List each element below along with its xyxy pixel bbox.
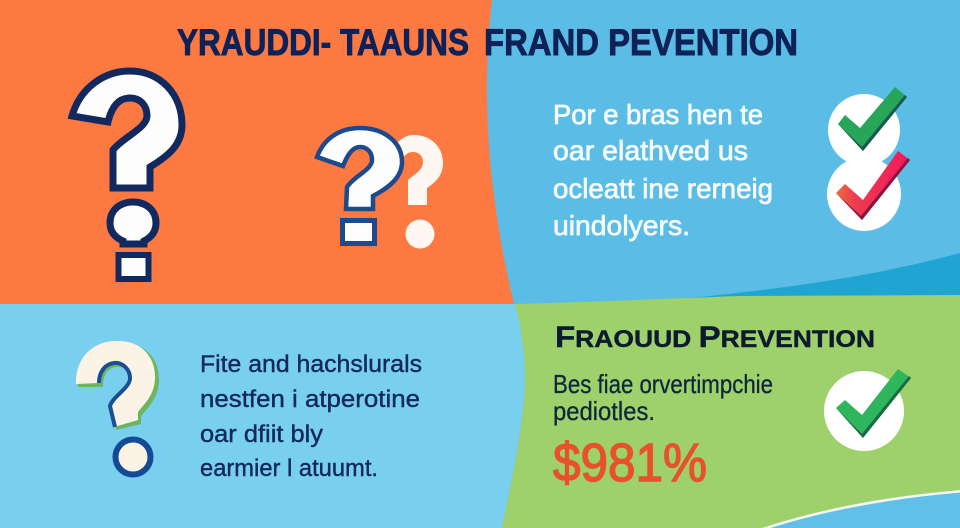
icon: large question mark [72,71,182,279]
statistic: percentage: $981% [553,433,707,493]
text block: bottom right body: pediotles. [553,396,655,426]
icon: green check badge lower [824,369,911,451]
title: FRAND PEVENTION [484,22,798,63]
title: YRAUDDI- TAAUNS [177,22,469,63]
text block: bottom left body: oar dfiit bly [200,421,323,448]
heading: fraud prevention: FRAOUUD PREVENTION [555,321,875,354]
panel: orange top left [0,0,520,305]
text block: top right body: oar elathved us [553,135,748,166]
panel: blue top right [487,0,960,304]
text block: top right body: Por e bras hen te [553,99,763,130]
text block: top right body [553,99,773,241]
title [177,22,798,63]
text block: bottom left body: Fite and hachslurals [200,351,422,378]
text block: top right body: ocleatt ine rerneig [553,173,773,204]
icon: red check badge [827,151,910,231]
text block: bottom right body: Bes fiae orvertimpchie [553,369,773,399]
icon: green check badge [828,87,907,166]
text block: bottom left body [200,351,422,482]
icon: cream question mark [76,341,159,474]
text block: bottom left body: nestfen i atperotine [200,386,420,413]
icon: white question mark behind [397,135,443,248]
text block: bottom right body [553,369,773,426]
panel: blue bottom right corner wave [760,491,960,528]
panel: darker blue corner wave [690,253,960,300]
text block: top right body: uindolyers. [553,210,690,241]
panel: green bottom right [502,295,960,528]
panel: light blue bottom left [0,304,525,528]
text block: bottom left body: earmier l atuumt. [200,455,378,482]
icon: medium question mark [317,128,402,244]
